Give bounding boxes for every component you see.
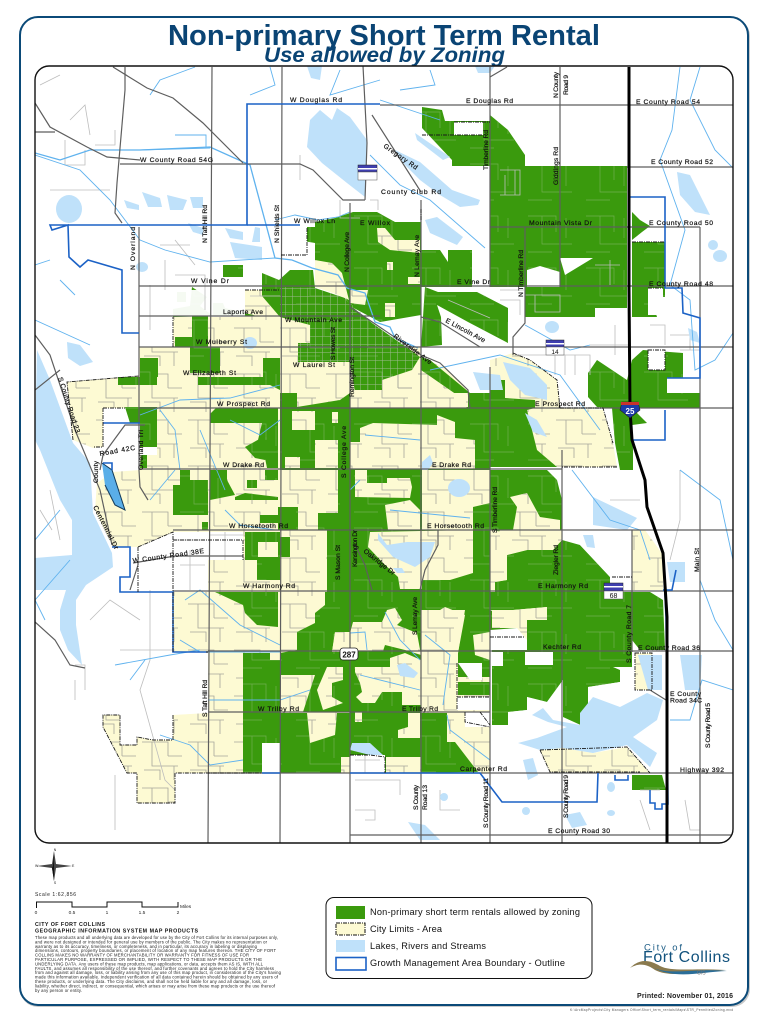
icon: north arrow [35, 848, 75, 885]
road labels: Giddings Rd [553, 147, 560, 185]
logo: City of Fort Collins GIS [630, 942, 730, 976]
road labels: Road 34C [670, 698, 702, 704]
road labels: E Vine Dr [457, 279, 491, 286]
road labels: W Prospect Rd [217, 401, 270, 408]
printed date: Printed: November 01, 2016 [637, 993, 733, 1000]
scale bar: 0 [35, 910, 38, 916]
city area holes in zoning [258, 228, 562, 773]
disclaimer text: UNDERLYING DATA. Any users of these map products, map applications, or data, accepts them AS IS, WITH ALL [35, 961, 264, 966]
map border [35, 66, 733, 843]
road labels: E County Road 48 [649, 281, 713, 288]
legend swatch: rentals allowed [336, 906, 365, 919]
road labels: W Horsetooth Rd [229, 523, 288, 530]
disclaimer text: warranty as to its accuracy, timeliness, or completeness, and in particular, its accuracy in labeling or displaying [35, 944, 258, 949]
road labels: Timberline Rd [483, 130, 490, 170]
white unincorporated enclaves [103, 122, 665, 773]
road labels: W Douglas Rd [290, 97, 342, 104]
roads [35, 66, 733, 843]
disclaimer text: PARTICULAR PURPOSE, EXPRESSED OR IMPLIED, WITH RESPECT TO THESE MAP PRODUCTS OR THE [35, 957, 262, 962]
logo: City of Fort Collins GIS: City of [644, 942, 682, 954]
shield: state highway 68 [604, 583, 623, 600]
icon: north arrow: S [54, 881, 57, 885]
scale bar: 1 [106, 910, 109, 916]
road labels: S Howes St [330, 327, 337, 360]
disclaimer text: These map products and all underlying data are developed for use by the City of Fort Collins for its internal purposes only, [35, 935, 278, 940]
road labels: Carpenter Rd [460, 766, 507, 773]
road labels: S County [413, 784, 420, 810]
road labels: E Willox [360, 220, 391, 227]
suburban streets on city area [67, 290, 663, 803]
road labels: E County Road 52 [651, 159, 713, 166]
streets in city area holes [258, 228, 562, 773]
road labels: S County Road 5 [705, 703, 712, 748]
disclaimer text: and were not designed or intended for general use by members of the public. The City makes no representation or [35, 939, 268, 944]
road labels: E Horsetooth Rd [427, 523, 484, 530]
road labels: W Drake Rd [223, 462, 264, 469]
disclaimer text [35, 935, 282, 993]
road labels: W Mountain Ave [285, 317, 342, 324]
road labels: W County Road 38E [132, 548, 205, 565]
faint county streets [40, 75, 700, 830]
scale text: Scale 1:62,856 [35, 892, 76, 898]
shield: state highway 14: 14 [551, 349, 559, 356]
water dark edge [102, 463, 125, 510]
scale bar [35, 902, 192, 916]
road labels: S Lemay Ave [412, 597, 419, 635]
disclaimer heading: GEOGRAPHIC INFORMATION SYSTEM MAP PRODUCTS [35, 928, 198, 934]
downtown street grid [280, 287, 420, 392]
road labels: Overland Trl [138, 430, 145, 470]
file path: K:\ArcMapProjects\City Managers Office\Short_term_rentals\Maps\STR_PermittedZoning.mxd [570, 1008, 733, 1012]
legend label: rentals allowed: Non-primary short term rentals allowed by zoning [370, 907, 580, 917]
logo: City of Fort Collins GIS: Fort Collins [643, 949, 730, 966]
road labels: E Trilby Rd [402, 706, 438, 713]
disclaimer text: COLLINS MAKES NO WARRANTY OF MERCHANTABILITY OR WARRANTY FOR FITNESS OF USE FOR [35, 953, 249, 958]
legend swatch: lakes [336, 940, 365, 952]
road labels: Centennial Dr [91, 505, 120, 551]
shield: US 287 [340, 648, 358, 660]
road labels: Ziegler Rd [553, 545, 560, 575]
road labels: E County Road 30 [548, 828, 610, 835]
disclaimer text: by any person or entity. [35, 988, 82, 993]
road labels: E County Road 36 [638, 645, 700, 652]
interstate 25 [629, 67, 667, 843]
disclaimer text: these products, or underlying data. The City disclaims, and shall not be held liable for any and all damage, loss, or [35, 979, 268, 984]
city limits area [67, 290, 663, 803]
shield: state highway 68: 68 [610, 593, 617, 600]
shield: US 287: 287 [342, 650, 356, 660]
disclaimer text: liability, whether direct, indirect, or consequential, which arises or may arise from these map products or the use thereof [35, 983, 276, 988]
logo: City of Fort Collins GIS: GIS [697, 970, 706, 976]
lakes, rivers and streams [35, 66, 727, 840]
road labels: N Overland [130, 227, 137, 270]
road labels: N Taft Hill Rd [202, 205, 209, 243]
scale bar: 1.5 [139, 910, 146, 916]
road labels: County [93, 460, 100, 483]
road labels: Riverside Ave [392, 333, 433, 366]
road labels: W Vine Dr [191, 278, 230, 285]
road labels: Road 42C [99, 445, 136, 458]
streams [30, 67, 735, 765]
shield: interstate 25 [620, 402, 640, 418]
road labels: S College Ave [341, 426, 348, 478]
icon: north arrow: N [54, 848, 57, 852]
road labels: W Laurel St [293, 362, 335, 369]
scale bar: 2 [177, 910, 180, 916]
road labels: Highway 392 [680, 767, 724, 774]
scale bar: 0.5 [69, 910, 76, 916]
road labels: Gregory Rd [382, 143, 419, 172]
road labels: W Elizabeth St [183, 370, 236, 377]
scale bar: Miles [180, 904, 192, 910]
road labels: N Lemay Ave [414, 235, 421, 277]
road labels: W Trilby Rd [258, 706, 299, 713]
road labels: S County Road 7 [626, 605, 633, 663]
road labels: E County Road 50 [649, 220, 713, 227]
road labels: E Harmony Rd [538, 583, 588, 590]
disclaimer text: dimensions, contours, property boundaries, or placement of location of any map features thereon. THE CITY OF FORT [35, 948, 276, 953]
road labels: N Timberline Rd [518, 250, 525, 297]
growth management area boundary [50, 104, 700, 809]
legend swatch: growth boundary [336, 958, 366, 970]
road labels: Oakridge Dr [362, 548, 397, 577]
road labels: E Drake Rd [432, 462, 471, 469]
disclaimer text: from and against all damage, loss, or liability arising from any use of this map product, in consideration of the City's having [35, 970, 282, 975]
road labels: Kechter Rd [543, 644, 581, 651]
road labels: S Timberline Rd [492, 487, 499, 533]
rental-allowed zoning areas [118, 107, 700, 790]
road labels: Main St [694, 548, 701, 572]
road labels: Mountain Vista Dr [529, 220, 593, 227]
panel: legend [326, 898, 592, 978]
road labels: Laporte Ave [223, 309, 263, 316]
shield: state highway 1 [358, 165, 377, 180]
disclaimer text: made this information available. Independent verification of all data contained herein should be obtained by any users of [35, 975, 279, 980]
city limits boundary [67, 122, 665, 803]
road labels: W County Road 54G [140, 157, 213, 164]
disclaimer text: FAULTS, and assumes all responsibility of the use thereof, and further covenants and agrees to hold the City harmless [35, 966, 274, 971]
legend label: city limits: City Limits - Area [370, 924, 443, 934]
road labels: N Shields St [274, 205, 281, 243]
title: Non-primary Short Term Rental [168, 20, 600, 52]
road labels: E County Road 54 [636, 99, 700, 106]
legend label: growth boundary: Growth Management Area Boundary - Outline [370, 958, 565, 968]
road labels: E Douglas Rd [466, 98, 513, 105]
road labels: W Willox Ln [294, 218, 335, 225]
legend swatch: city limits [336, 923, 365, 935]
streets within zoning areas [118, 107, 700, 790]
disclaimer heading: CITY OF FORT COLLINS [35, 922, 105, 928]
subtitle: Use allowed by Zoning [264, 44, 505, 67]
road labels: S County Road 9 [563, 775, 570, 818]
road labels: E County [670, 691, 702, 698]
road labels: S County Road 11 [483, 778, 490, 828]
road labels [56, 71, 724, 835]
legend label: lakes: Lakes, Rivers and Streams [370, 941, 486, 951]
road labels: Road 9 [563, 75, 570, 95]
road labels: S Mason St [335, 545, 342, 580]
shield: state highway 14 [546, 340, 564, 356]
road labels: W Mulberry St [196, 339, 247, 346]
panel: zoning map [30, 66, 735, 843]
road labels: E Lincoln Ave [444, 318, 486, 345]
road labels: E Prospect Rd [535, 401, 585, 408]
road labels: N College Ave [344, 232, 351, 272]
icon: north arrow: E [72, 864, 75, 868]
disclaimer heading [35, 922, 198, 934]
road labels: S County Road 23 [56, 376, 81, 434]
road labels: S Taft Hill Rd [202, 680, 209, 717]
road labels: County Club Rd [381, 189, 441, 196]
highway shields [340, 165, 640, 660]
icon: north arrow: W [35, 864, 39, 868]
road labels: N County [553, 71, 560, 98]
shield: interstate 25: 25 [626, 407, 635, 416]
road labels: Kensington Dr [352, 529, 359, 567]
road labels: Road 13 [422, 785, 429, 810]
road labels: Remington St [349, 357, 356, 397]
road labels: W Harmony Rd [243, 583, 295, 590]
